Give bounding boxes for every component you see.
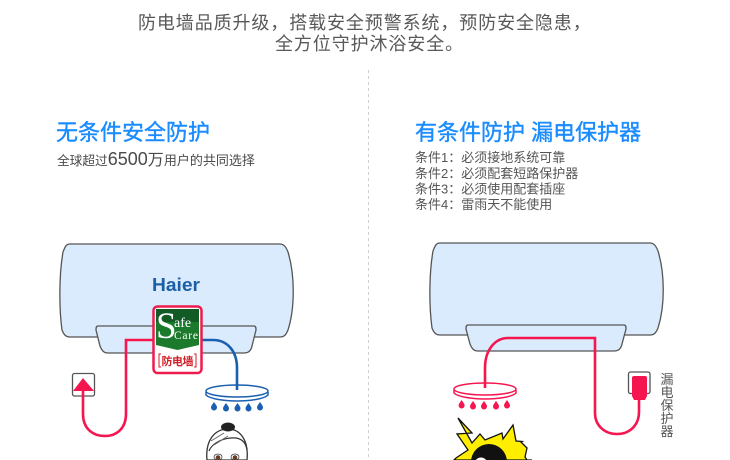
Safe Care badge: afe [174, 316, 191, 331]
intro heading: 防电墙品质升级，搭载安全预警系统，预防安全隐患， [138, 13, 592, 33]
intro heading [138, 13, 592, 54]
leakage protector label: 保 [660, 398, 674, 413]
right panel conditions list: 条件1：必须接地系统可靠 [415, 150, 565, 165]
right panel conditions list [415, 150, 578, 212]
icon: electric shock burst [454, 418, 532, 460]
right shower head [454, 383, 516, 399]
leakage protector label: 电 [660, 385, 674, 400]
right panel conditions list: 条件2：必须配套短路保护器 [415, 166, 578, 181]
Safe Care badge: 防电墙 [162, 354, 194, 368]
leakage protector label: 漏 [660, 372, 674, 387]
right red wire [485, 338, 639, 434]
intro heading: 全方位守护沐浴安全。 [275, 34, 464, 54]
Safe Care badge [154, 306, 202, 373]
right panel heading: 有条件防护 漏电保护器 [415, 120, 641, 145]
left red wire and socket [72, 340, 153, 436]
left water drops [211, 402, 263, 412]
Haier logo: Haier [152, 274, 200, 295]
left panel heading: 无条件安全防护 [56, 120, 210, 145]
right warning drops [459, 400, 510, 410]
icon: wall socket [72, 374, 94, 396]
leakage protector label: 器 [660, 424, 674, 439]
icon: leakage protector plug [628, 372, 650, 400]
right water heater [430, 243, 663, 351]
Safe Care badge: Care [174, 330, 198, 342]
left panel subheading: 全球超过6500万用户的共同选择 [57, 149, 255, 169]
left water heater [60, 244, 293, 353]
Safe Care badge: S [156, 306, 177, 347]
right panel conditions list: 条件4：雷雨天不能使用 [415, 197, 552, 212]
icon: cartoon person [207, 422, 247, 460]
left blue water pipe [200, 340, 237, 390]
icon: plug arrow [73, 378, 94, 391]
left shower head [206, 385, 268, 401]
leakage protector label [660, 372, 674, 439]
leakage protector label: 护 [660, 411, 674, 426]
right panel conditions list: 条件3：必须使用配套插座 [415, 182, 565, 196]
